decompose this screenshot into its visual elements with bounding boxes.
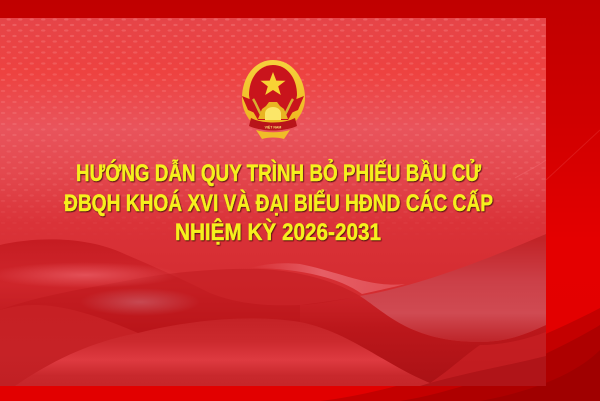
emblem star bbox=[260, 72, 286, 95]
emblem banner bbox=[249, 118, 297, 130]
dot pattern bbox=[1, 18, 546, 212]
emblem bbox=[242, 60, 305, 139]
emblem motto: VIỆT NAM bbox=[265, 124, 281, 130]
emblem factory arch bbox=[265, 107, 281, 120]
emblem wheat sprigs bbox=[253, 99, 293, 118]
title line 3: NHIỆM KỲ 2026-2031 bbox=[175, 218, 381, 246]
title line 2: ĐBQH KHOÁ XVI VÀ ĐẠI BIỂU HĐND CÁC CẤP bbox=[64, 189, 493, 217]
emblem gear bbox=[258, 102, 288, 119]
emblem side ribbons bbox=[242, 96, 304, 116]
emblem red disc bbox=[249, 65, 297, 120]
corner waves bbox=[320, 130, 600, 401]
waves bbox=[0, 160, 546, 386]
emblem gold wreath bbox=[242, 60, 305, 128]
emblem base bbox=[256, 130, 290, 139]
title bbox=[64, 158, 493, 246]
title line 1: HƯỚNG DẪN QUY TRÌNH BỎ PHIẾU BẦU CỬ bbox=[76, 158, 481, 187]
